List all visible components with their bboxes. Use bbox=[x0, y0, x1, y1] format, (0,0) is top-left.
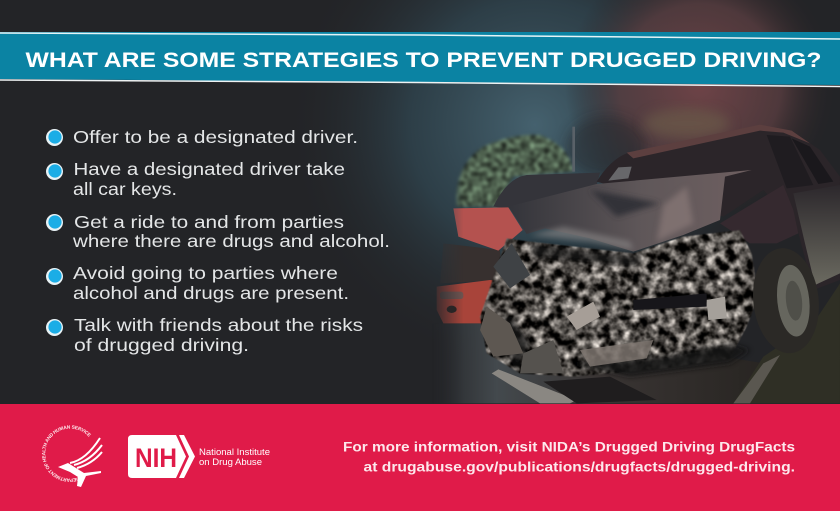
NIH logo: NIH bbox=[135, 443, 177, 473]
bush behind the cars bbox=[456, 135, 573, 207]
NIH logo: on Drug Abuse bbox=[199, 457, 262, 467]
strategy list bbox=[46, 127, 390, 355]
photo: crashed cars at night bbox=[430, 108, 840, 403]
strategy 3: where there are drugs and alcohol. bbox=[72, 231, 390, 251]
more information text: For more information, visit NIDA’s Drugged Driving DrugFacts bbox=[343, 440, 795, 454]
strategy 5: Talk with friends about the risks bbox=[74, 315, 363, 335]
upper foliage bbox=[643, 108, 730, 138]
more information text: at drugabuse.gov/publications/drugfacts/drugged-driving. bbox=[364, 460, 795, 474]
HHS seal bbox=[42, 425, 103, 487]
front wheel bbox=[753, 264, 818, 344]
dark sky behind the pole bbox=[567, 117, 647, 177]
strategy 4 bbox=[46, 263, 349, 303]
NIH logo bbox=[128, 435, 270, 478]
road surface bbox=[430, 323, 763, 403]
street pole bbox=[572, 127, 575, 172]
strategy 5: of drugged driving. bbox=[74, 335, 249, 355]
strategy 4: Avoid going to parties where bbox=[73, 263, 338, 283]
HHS seal: DEPARTMENT OF HEALTH AND HUMAN SERVICES USA bbox=[42, 425, 92, 482]
more information text bbox=[343, 440, 795, 474]
NIH logo: National Institute bbox=[199, 447, 270, 457]
strategy 3: Get a ride to and from parties bbox=[74, 212, 344, 232]
red car behind bbox=[437, 173, 600, 323]
dark background bbox=[0, 0, 840, 405]
strategy 2: all car keys. bbox=[73, 179, 177, 199]
strategy 1: Offer to be a designated driver. bbox=[73, 127, 358, 147]
black car cabin bbox=[597, 125, 840, 290]
strategy 5 bbox=[46, 315, 363, 355]
wrecked engine bay bbox=[480, 230, 758, 377]
grass verge bbox=[733, 283, 840, 403]
strategy 2 bbox=[46, 159, 345, 199]
title banner bbox=[0, 32, 840, 86]
bumper debris on the road bbox=[492, 355, 780, 403]
strategy 2: Have a designated driver take bbox=[74, 159, 345, 179]
strategy 4: alcohol and drugs are present. bbox=[73, 283, 349, 303]
crumpled hood bbox=[508, 170, 752, 252]
title: WHAT ARE SOME STRATEGIES TO PREVENT DRUGGED DRIVING? bbox=[26, 49, 822, 72]
strategy 3 bbox=[46, 212, 390, 251]
